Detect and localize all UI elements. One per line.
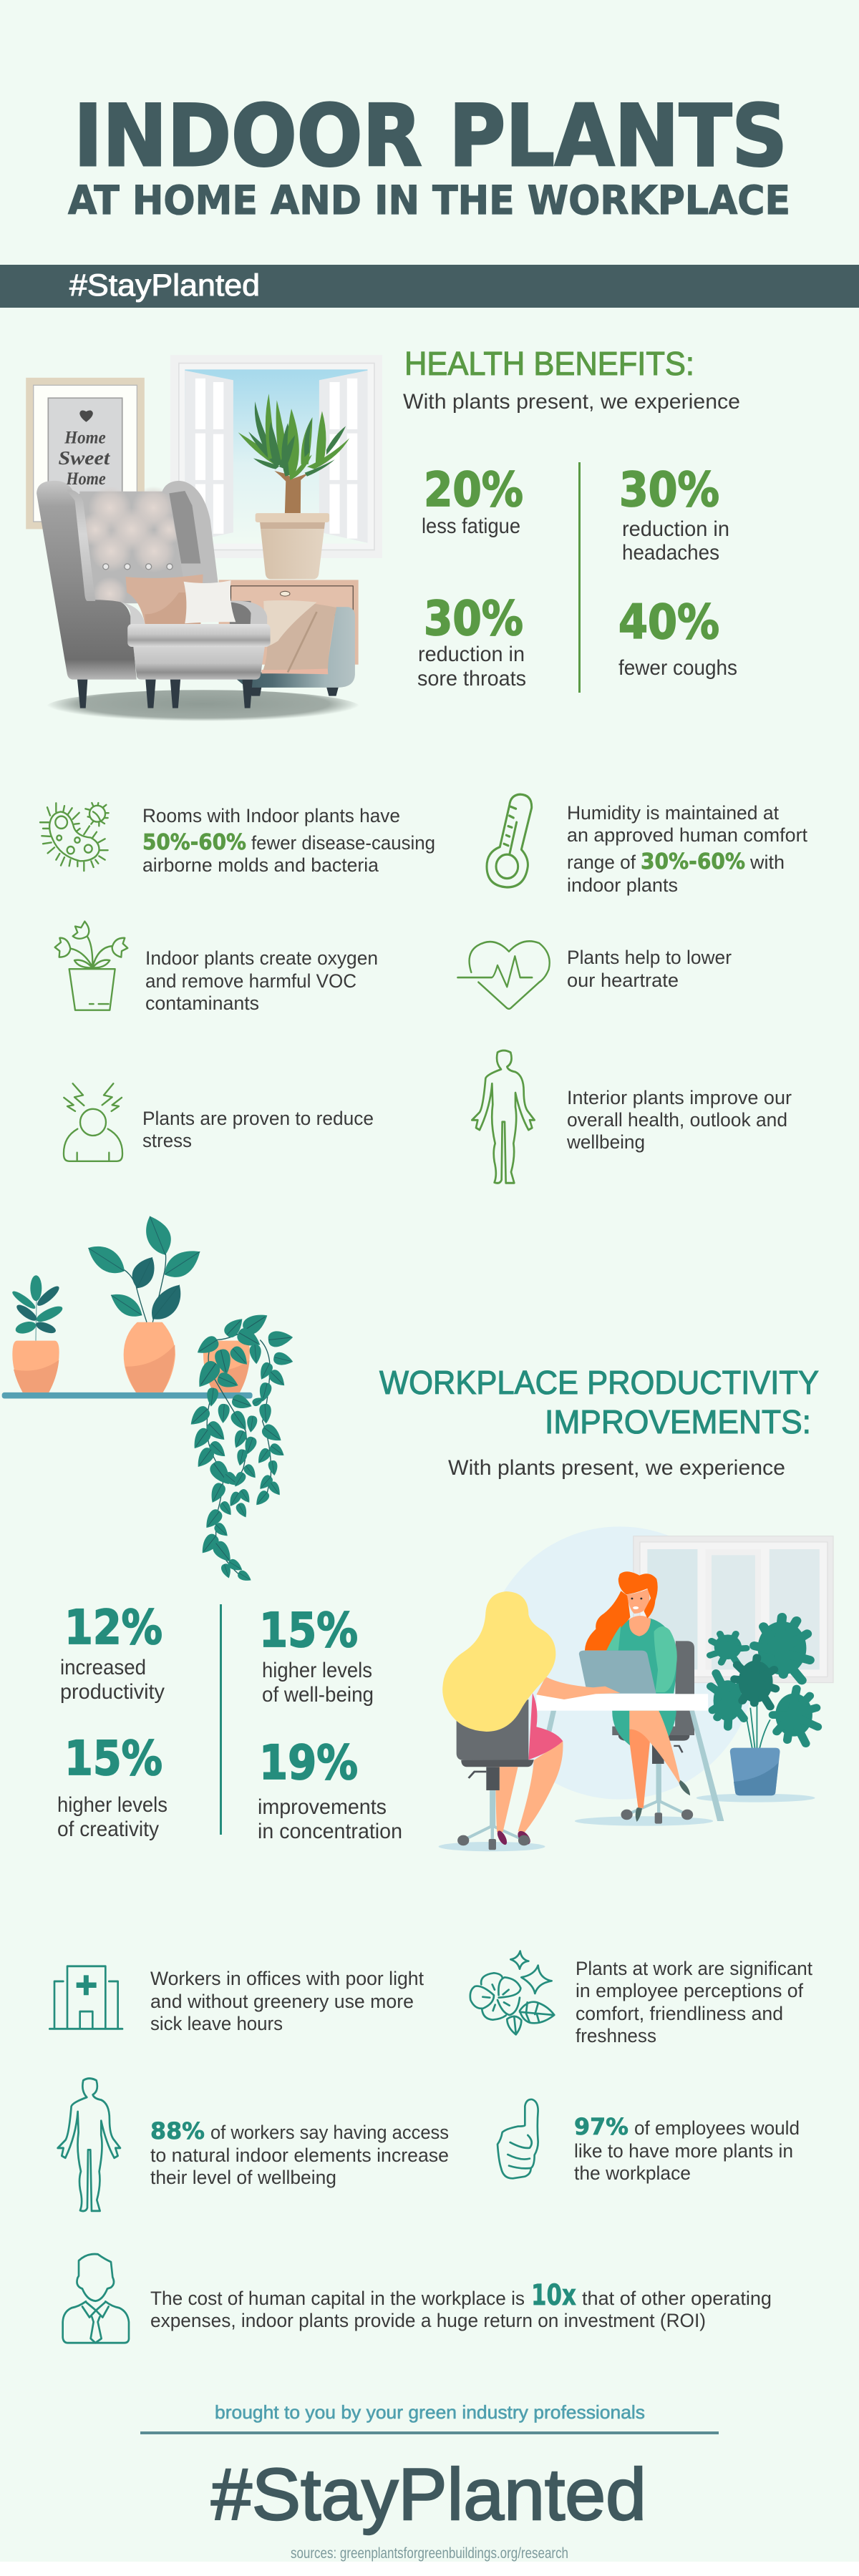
text: molds and bacteria: Rooms with Indoor plants have	[142, 805, 400, 826]
closing hashtag: #StayPlanted	[211, 2454, 646, 2535]
monstera plant	[710, 1617, 817, 1795]
text: molds and bacteria: fewer disease-causing	[251, 832, 435, 854]
stat: 40% fewer coughs: fewer coughs	[618, 656, 737, 680]
illustration: side table	[219, 580, 359, 665]
stat: 40% fewer coughs	[618, 595, 737, 680]
stat: 30% headaches: reduction in	[622, 517, 729, 541]
stat: 30% sore throats	[417, 591, 526, 691]
text: 97% of employees: of employees would	[634, 2117, 800, 2139]
text: stress: Plants are proven to reduce	[142, 1108, 374, 1129]
icon: heart rate	[457, 941, 550, 1009]
footer rule	[140, 2431, 719, 2434]
icon: flower and sparkles	[470, 1951, 554, 2034]
text: 88% of workers: of workers say having access	[210, 2122, 449, 2143]
blonde woman on chair	[442, 1591, 620, 1850]
stat: 15% creativity: of creativity	[57, 1818, 159, 1841]
text: heartrate: Plants help to lower	[567, 947, 732, 968]
stat: 30% headaches: headaches	[622, 541, 719, 565]
text: molds and bacteria: 50%-60%	[142, 830, 246, 855]
stat: 20% less fatigue: less fatigue	[422, 514, 520, 538]
stat: 15% creativity	[57, 1731, 168, 1841]
text: sick leave	[150, 1968, 424, 2034]
text: 88% of workers: to natural indoor elements increase	[150, 2145, 449, 2166]
illustration: armchair room scene: Home	[64, 426, 106, 447]
text: sick leave: Workers in offices with poor light	[150, 1968, 424, 1989]
divider	[578, 462, 581, 693]
stat: 15% well-being: 15%	[259, 1603, 358, 1658]
text: humidity: an approved human comfort	[567, 824, 807, 846]
text: humidity: with	[749, 852, 785, 873]
illustration: armchair room scene: Home	[65, 468, 106, 489]
stat: 40% fewer coughs: 40%	[618, 595, 719, 650]
panel: health benefits	[403, 345, 740, 693]
plant pot middle	[88, 1216, 200, 1392]
text: perceptions: comfort, friendliness and	[576, 2003, 783, 2024]
heading: workplace productivity: IMPROVEMENTS:	[545, 1403, 811, 1440]
illustration: armchair room scene: Sweet	[59, 447, 111, 469]
text: 88% of workers	[150, 2117, 449, 2188]
text: humidity: 30%-60%	[641, 849, 745, 874]
text: humidity: range of	[567, 852, 636, 873]
text: 88% of workers: 88%	[150, 2117, 205, 2145]
heading: workplace productivity: WORKPLACE PRODUCTIVITY	[379, 1364, 819, 1401]
text: oxygen: and remove harmful VOC	[145, 970, 356, 992]
icon: thermometer	[487, 794, 532, 887]
text: wellbeing: overall health, outlook and	[567, 1109, 787, 1131]
stat: 19% concentration: 19%	[259, 1735, 358, 1790]
text: perceptions: freshness	[576, 2025, 656, 2046]
text: oxygen: Indoor plants create oxygen	[145, 947, 378, 969]
text: stress	[142, 1108, 374, 1151]
plant pot left	[11, 1275, 64, 1392]
stat: 12% productivity: increased	[60, 1656, 146, 1679]
icon: businessman	[63, 2254, 129, 2343]
text: perceptions: in employee perceptions of	[576, 1980, 803, 2001]
hashtag band: #StayPlanted	[69, 268, 260, 303]
text: oxygen: contaminants	[145, 992, 259, 1014]
text: wellbeing	[566, 1087, 792, 1153]
text: wellbeing: wellbeing	[566, 1131, 645, 1153]
text: molds and bacteria	[142, 805, 435, 876]
credit line: brought to you by your green industry professionals	[215, 2401, 645, 2423]
icon: human body teal	[58, 2079, 120, 2211]
text: return on investment: The cost of human capital in the workplace is	[150, 2288, 525, 2309]
stat: 30% sore throats: reduction in	[418, 643, 525, 666]
icon: stressed person	[64, 1083, 122, 1161]
stat: 19% concentration: in concentration	[258, 1820, 402, 1843]
red-haired woman on chair	[579, 1571, 694, 1824]
stat: 15% creativity: 15%	[64, 1731, 162, 1786]
stat: 12% productivity	[60, 1600, 165, 1704]
text: stress: stress	[142, 1130, 192, 1151]
icon: potted flower	[55, 922, 127, 1010]
stat: 15% well-being: higher levels	[262, 1659, 372, 1682]
trailing vine plant	[186, 1308, 294, 1584]
illustration: yucca plant in pot	[238, 394, 349, 579]
stat: 30% sore throats: 30%	[424, 591, 523, 646]
text: molds and bacteria: airborne molds and bacteria	[142, 854, 379, 876]
stat: 30% headaches	[619, 462, 729, 565]
stat: 20% less fatigue: 20%	[424, 462, 523, 517]
icon: human body green	[472, 1050, 535, 1183]
stat: 19% concentration: improvements	[258, 1795, 387, 1819]
divider	[220, 1604, 222, 1835]
title: INDOOR PLANTS	[74, 87, 787, 186]
text: heartrate: our heartrate	[567, 970, 679, 991]
text: sick leave: and without greenery use more	[150, 1991, 414, 2012]
stat: 15% creativity: higher levels	[57, 1793, 168, 1817]
text: humidity	[567, 802, 807, 896]
stat: 15% well-being	[259, 1603, 374, 1707]
stat: 20% less fatigue	[422, 462, 523, 538]
stat: 19% concentration	[258, 1735, 402, 1843]
text: return on investment: 10x	[531, 2279, 576, 2312]
table	[536, 1694, 724, 1822]
heading: workplace productivity	[379, 1364, 819, 1440]
icon: thumbs up	[498, 2099, 538, 2178]
text: humidity: indoor plants	[567, 874, 678, 896]
text: perceptions	[576, 1958, 812, 2046]
text: sick leave: sick leave hours	[150, 2013, 283, 2034]
footer	[140, 2401, 719, 2562]
text: 97% of employees: 97%	[574, 2113, 629, 2140]
icon: hospital building	[49, 1966, 122, 2029]
text: return on investment	[150, 2279, 772, 2331]
text: humidity: Humidity is maintained at	[567, 802, 779, 824]
subheading: With plants present, we experience	[403, 390, 740, 414]
text: 88% of workers: their level of wellbeing	[150, 2167, 336, 2188]
text: 97% of employees: like to have more plants in	[574, 2140, 793, 2162]
illustration: armchair room scene	[26, 355, 382, 725]
subheading: With plants present, we experience	[448, 1456, 785, 1480]
text: 97% of employees: the workplace	[574, 2162, 691, 2184]
text: heartrate	[567, 947, 732, 991]
text: return on investment: that of other operating	[582, 2288, 772, 2309]
stat: 30% headaches: 30%	[619, 462, 719, 517]
text: 97% of employees	[574, 2113, 800, 2184]
icon: bacteria	[40, 803, 109, 871]
stat: 30% sore throats: sore throats	[417, 667, 526, 691]
sources: sources: greenplantsforgreenbuildings.org/research	[291, 2545, 568, 2562]
title	[68, 87, 790, 223]
stat: 12% productivity: 12%	[64, 1600, 162, 1655]
stat: 15% well-being: of well-being	[262, 1683, 374, 1707]
illustration: office meeting	[439, 1526, 833, 1851]
illustration: shelf with plants	[2, 1216, 294, 1584]
text: wellbeing: Interior plants improve our	[567, 1087, 792, 1108]
window	[634, 1536, 833, 1683]
text: oxygen	[145, 947, 378, 1014]
text: perceptions: Plants at work are significant	[576, 1958, 812, 1979]
heading: health benefits: HEALTH BENEFITS:	[404, 345, 694, 382]
illustration: armchair	[37, 481, 271, 680]
panel: workplace productivity	[57, 1364, 819, 1843]
text: return on investment: expenses, indoor plants provide a huge return on investment (ROI)	[150, 2310, 706, 2331]
title: AT HOME AND IN THE WORKPLACE	[68, 177, 790, 223]
stat: 12% productivity: productivity	[60, 1680, 165, 1704]
hashtag band	[0, 265, 859, 308]
